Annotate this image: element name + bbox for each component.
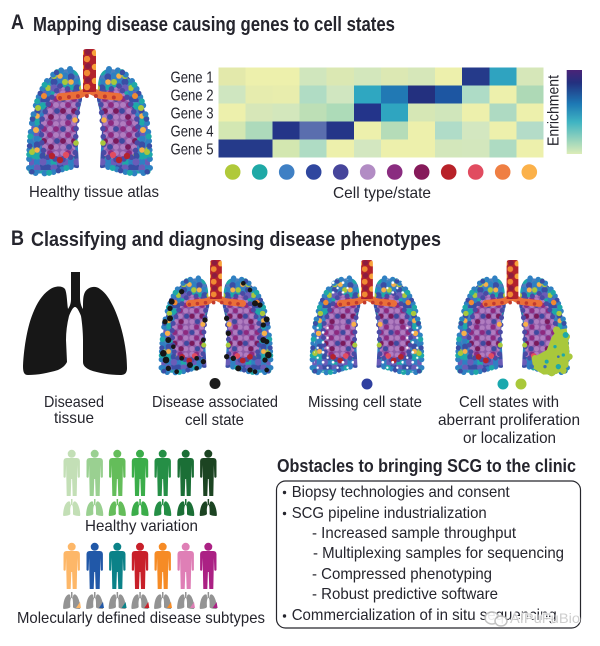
gene labels [170, 70, 214, 158]
panel: obstacles list: - Robust predictive software [312, 586, 498, 603]
caption: healthy tissue atlas: Healthy tissue atlas [29, 184, 159, 201]
panel label A: A [11, 11, 24, 34]
gene labels: Gene 2 [170, 88, 214, 104]
mini lungs row: healthy variation [63, 499, 217, 516]
panel: obstacles list: SCG pipeline industrialization [292, 505, 487, 522]
legend dots: aberrant cell states [498, 378, 526, 390]
gene labels: Gene 1 [170, 70, 214, 86]
gene labels: Gene 3 [170, 106, 214, 122]
heatmap: gene enrichment by cell state [218, 67, 543, 158]
heading: panel A: Mapping disease causing genes to cell states [33, 14, 395, 36]
lung illustration: missing cell state [312, 260, 422, 373]
panel: obstacles list: - Compressed phenotyping [312, 566, 492, 583]
axis label: cell type/state: Cell type/state [333, 185, 431, 202]
caption: aberrant proliferation or localization [438, 394, 580, 447]
watermark: AIPuFuBio [510, 610, 580, 626]
lung illustration: healthy tissue atlas [29, 49, 150, 174]
legend dot: missing cell state [362, 378, 372, 390]
mini lungs row: disease subtypes [63, 592, 218, 609]
panel: obstacles list: Commercialization of in situ sequencing [292, 607, 557, 624]
panel label B: B [11, 227, 24, 250]
icon: diseased tissue black lungs [23, 272, 127, 375]
caption: aberrant proliferation or localization: or localization [463, 430, 556, 447]
caption: diseased tissue [44, 394, 104, 427]
caption: diseased tissue: Diseased [44, 394, 104, 411]
caption: aberrant proliferation or localization: aberrant proliferation [438, 412, 580, 429]
lung illustration: disease associated cell state [160, 260, 272, 374]
panel: obstacles list: - Increased sample throughput [312, 525, 517, 542]
caption: disease associated cell state: Disease associated [152, 394, 278, 411]
caption: disease associated cell state [152, 394, 278, 429]
caption: healthy variation: Healthy variation [85, 518, 198, 535]
gene labels: Gene 4 [170, 124, 214, 140]
people row: healthy variation [63, 450, 216, 496]
cell type colour dots [225, 164, 537, 180]
legend label: enrichment: Enrichment [546, 75, 562, 146]
caption: missing cell state: Missing cell state [308, 394, 422, 411]
legend dot: disease associated state [210, 378, 220, 389]
panel: obstacles list: - Multiplexing samples for sequencing [313, 545, 564, 562]
panel: obstacles list [276, 481, 580, 628]
legend colour bar: enrichment [567, 70, 582, 154]
panel: obstacles list: Biopsy technologies and consent [292, 484, 510, 501]
caption: disease subtypes: Molecularly defined disease subtypes [17, 610, 265, 627]
caption: aberrant proliferation or localization: Cell states with [459, 394, 559, 411]
caption: diseased tissue: tissue [54, 410, 94, 427]
caption: disease associated cell state: cell state [185, 412, 244, 429]
people row: disease subtypes [63, 543, 216, 589]
gene labels: Gene 5 [170, 142, 214, 158]
lung illustration: aberrant proliferation [458, 260, 573, 376]
heading: panel B: Classifying and diagnosing disease phenotypes [31, 229, 441, 251]
